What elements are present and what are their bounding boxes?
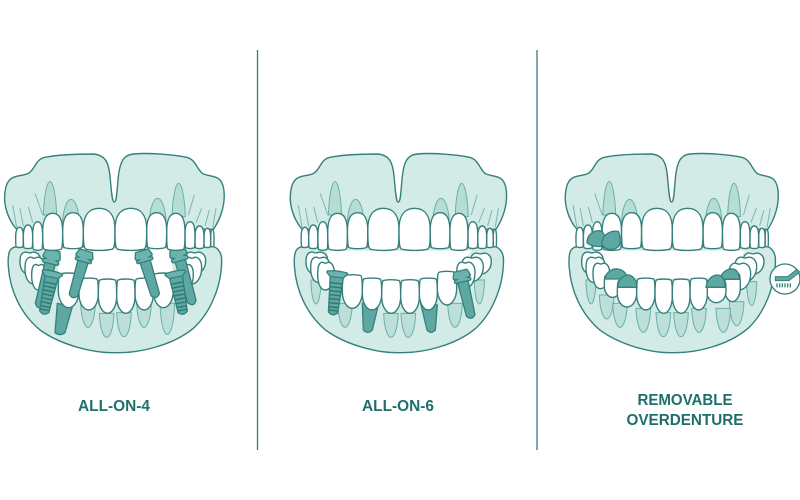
lower front teeth <box>342 271 457 313</box>
label: Removable overdenture: OVERDENTURE <box>626 412 744 429</box>
label: All-on-4: ALL-ON-4 <box>78 398 150 415</box>
implant: long angled right <box>168 245 201 307</box>
implant: anterior left <box>64 248 95 300</box>
lower ghost roots <box>586 280 757 337</box>
screw implant left <box>323 270 348 316</box>
upper arch <box>290 154 507 250</box>
label: All-on-6: ALL-ON-6 <box>362 398 434 415</box>
panel: Removable overdenture dental arch <box>565 154 800 353</box>
lower gum <box>294 247 504 353</box>
divider: left <box>256 50 258 450</box>
implant: anterior right <box>133 248 165 300</box>
screw implant left <box>34 269 63 316</box>
mouth opening <box>600 251 745 278</box>
lower teeth <box>604 273 740 313</box>
panel: All-on-4 dental arch <box>5 154 224 353</box>
upper arch <box>5 154 224 250</box>
panel: All-on-6 dental arch <box>290 154 507 353</box>
dark roots of front implants <box>362 303 437 332</box>
lower ghost roots <box>81 303 175 337</box>
mouth opening <box>327 251 472 279</box>
lower front teeth <box>58 273 173 313</box>
lower gum <box>8 247 222 353</box>
implant right <box>452 269 480 320</box>
lower gum <box>569 247 775 353</box>
mouth opening <box>57 248 173 279</box>
lower left dark root <box>55 303 72 335</box>
dark attachment caps upper <box>587 231 620 249</box>
lower back teeth <box>582 252 764 290</box>
implant: long angled left <box>30 248 62 310</box>
label: Removable overdenture: REMOVABLE <box>638 392 732 409</box>
dark attachment caps lower <box>605 269 739 287</box>
lower ghost roots <box>311 280 484 337</box>
label: Removable overdenture <box>626 392 744 429</box>
lower back teeth <box>20 252 206 290</box>
divider: right <box>536 50 538 450</box>
screw implant right <box>165 269 193 316</box>
icon: toothbrush badge <box>770 264 800 294</box>
upper arch <box>565 154 778 250</box>
lower back teeth <box>306 252 491 290</box>
